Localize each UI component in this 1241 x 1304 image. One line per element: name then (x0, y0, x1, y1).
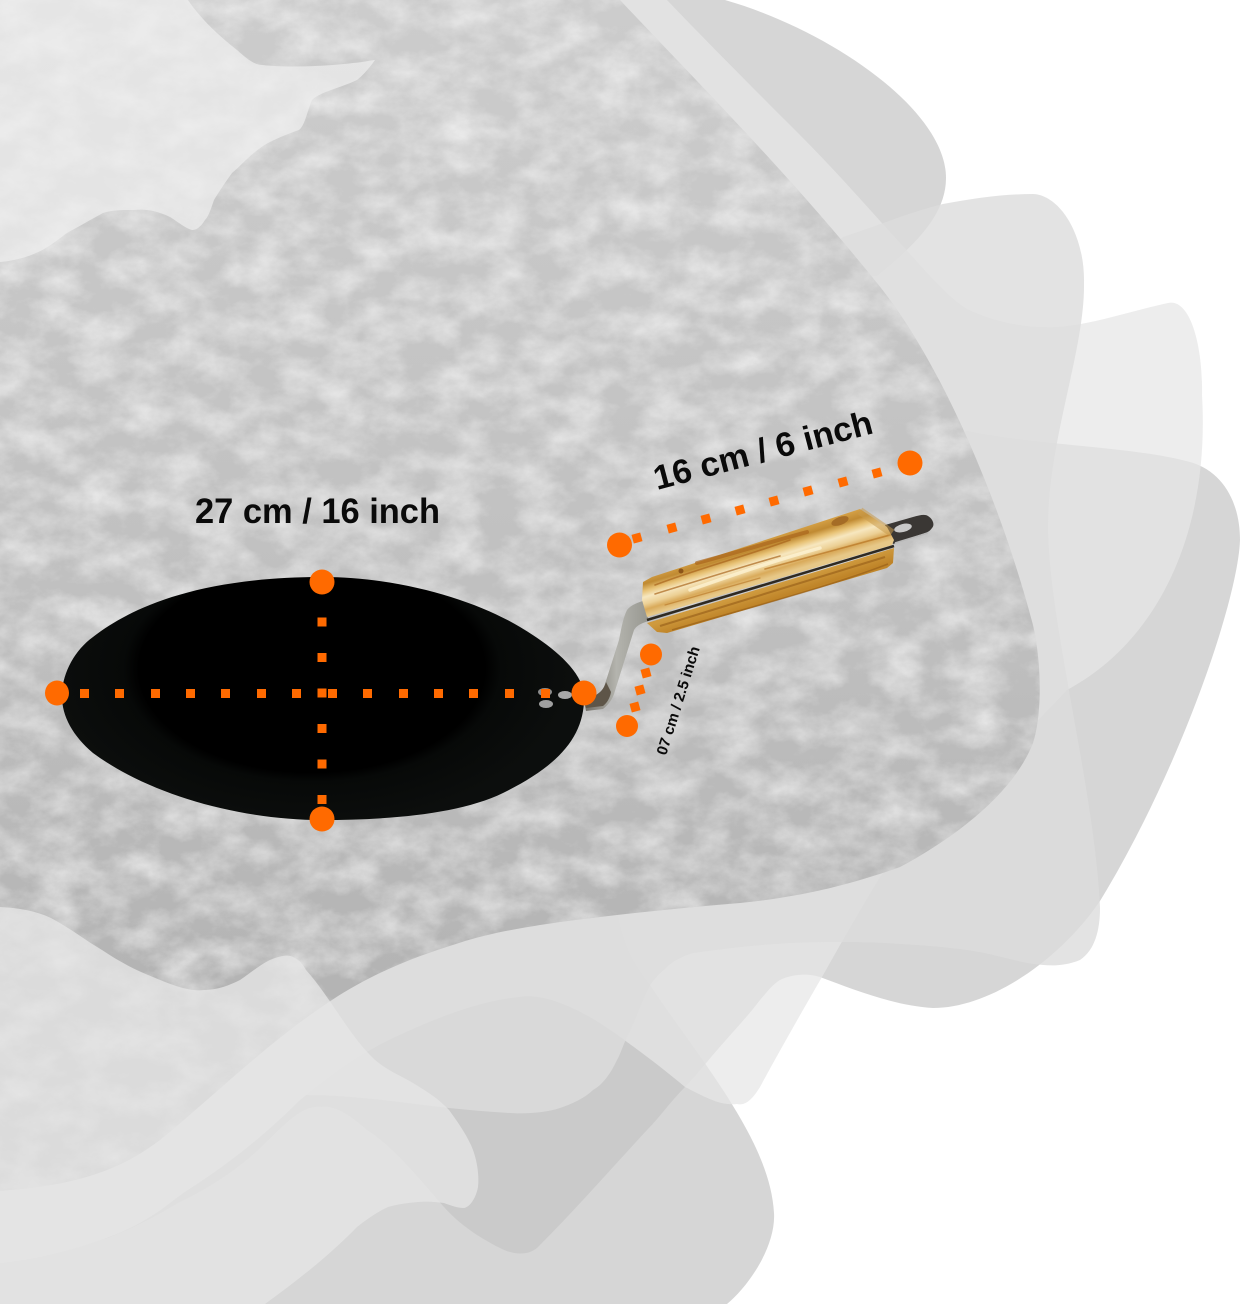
handle: wooden grip (642, 509, 894, 633)
wood: upper face grain (655, 511, 892, 605)
light cloud: top left (0, 0, 375, 262)
handle: metal stem (584, 601, 649, 711)
wood: lower face (647, 548, 894, 633)
background blob: top right dark (600, 0, 946, 300)
wood: slit (647, 546, 894, 620)
label: handle height: 07 cm / 2.5 inch (654, 644, 704, 757)
stone textured panel (0, 0, 1040, 1171)
label: pan diameter: 27 cm / 16 inch (195, 492, 440, 531)
background blob: ribbon around stone (0, 194, 1100, 1263)
light blob: bottom left (0, 907, 478, 1304)
wood: upper face (642, 509, 894, 617)
pan body (62, 577, 584, 820)
width dimension line (45, 680, 596, 706)
pan rivets (538, 688, 572, 708)
handle: tail with hole (885, 515, 933, 544)
background blob: bottom large (0, 900, 774, 1304)
background blob: right and lower sweep (0, 431, 1240, 1263)
handle height dimension line (616, 644, 662, 737)
height dimension line (310, 570, 334, 832)
wood: lower face grain (660, 557, 888, 630)
label: handle length: 16 cm / 6 inch (649, 404, 877, 498)
handle length dimension line (607, 450, 922, 558)
